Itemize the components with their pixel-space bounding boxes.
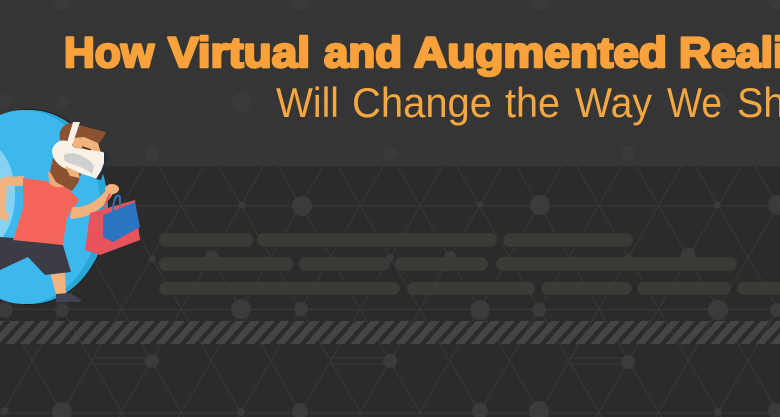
left arm bbox=[0, 176, 24, 222]
subtitle: Change bbox=[352, 79, 492, 126]
bar row 1 bbox=[159, 233, 633, 247]
title: How bbox=[64, 29, 155, 77]
t-shirt bbox=[13, 178, 79, 245]
subtitle: the bbox=[505, 79, 560, 126]
face bbox=[73, 137, 101, 153]
placeholder text bars bbox=[159, 233, 780, 295]
title bbox=[64, 29, 780, 77]
headset strap bbox=[66, 122, 80, 146]
title: Virtual bbox=[168, 29, 310, 77]
headset shade bbox=[64, 153, 94, 174]
nose and mouth bbox=[65, 166, 80, 178]
subtitle: We bbox=[667, 79, 722, 126]
title: and bbox=[324, 29, 402, 77]
illustration: shopper wearing VR headset bbox=[0, 109, 140, 305]
bar row 2 bbox=[159, 257, 737, 271]
headset front edge bbox=[96, 152, 109, 180]
subtitle bbox=[276, 79, 780, 126]
blue bag handle bbox=[113, 195, 120, 212]
hand bbox=[105, 184, 119, 194]
background lower band bbox=[0, 166, 780, 417]
network nodes, top band bbox=[0, 0, 780, 161]
blue shopping bag bbox=[103, 202, 140, 242]
hair bbox=[60, 123, 106, 146]
neck bbox=[48, 172, 66, 188]
headset body bbox=[52, 140, 107, 179]
shorts bbox=[0, 237, 71, 275]
title: Augmented bbox=[414, 29, 667, 77]
background top band bbox=[0, 0, 780, 166]
bar row 3 bbox=[159, 282, 780, 295]
red bag handle bbox=[103, 190, 113, 214]
network nodes, lower band bbox=[0, 195, 780, 417]
eye bbox=[82, 147, 91, 150]
blue portal bbox=[0, 109, 109, 305]
red shopping bag bbox=[85, 200, 140, 255]
shoe bbox=[56, 293, 81, 302]
subtitle: Will bbox=[276, 79, 339, 126]
beard bbox=[50, 158, 82, 191]
front leg bbox=[50, 272, 66, 295]
subtitle: Way bbox=[575, 79, 652, 126]
right arm bbox=[70, 188, 114, 219]
striped band bbox=[0, 321, 780, 344]
